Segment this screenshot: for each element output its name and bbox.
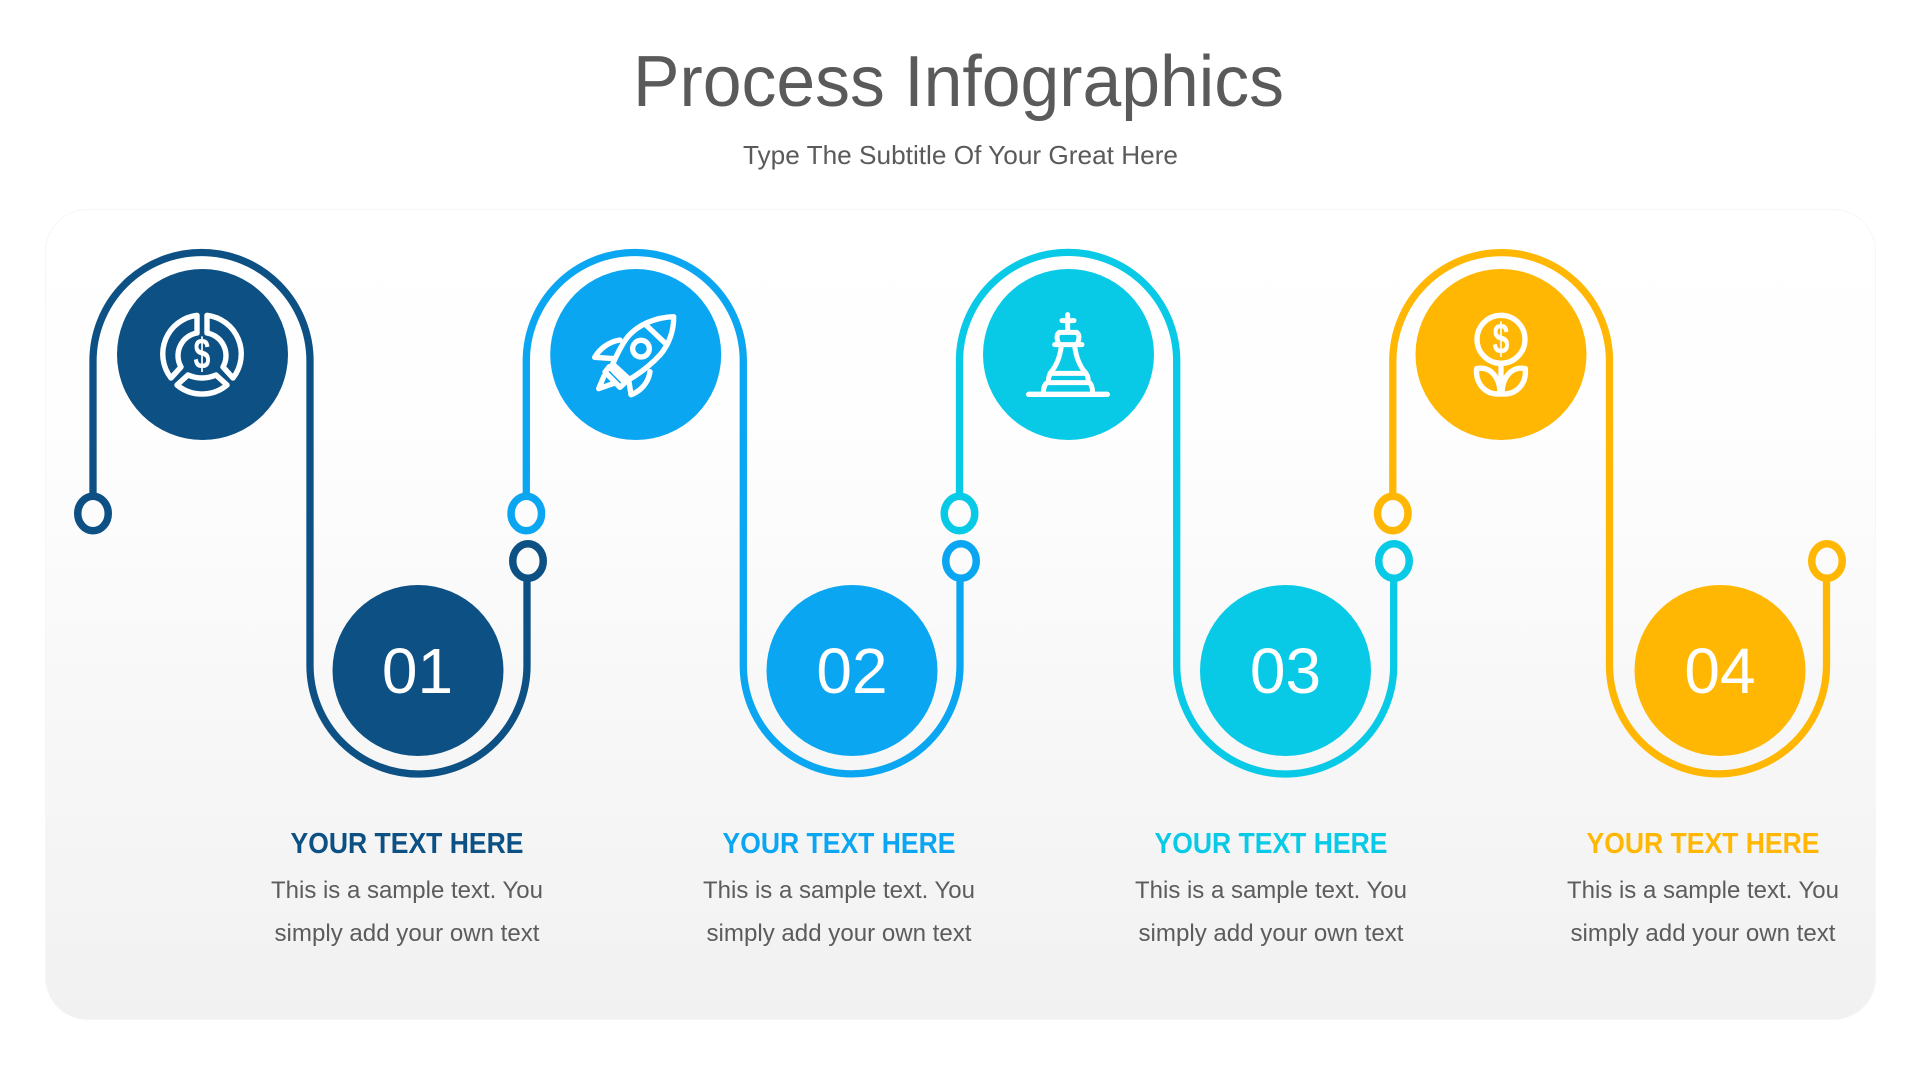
title: Process Infographics	[633, 42, 1284, 122]
body text 2	[703, 877, 975, 947]
start ring 4	[1378, 496, 1408, 531]
icon circle 2	[550, 269, 721, 440]
subtitle: Type The Subtitle Of Your Great Here	[743, 140, 1178, 170]
number circle 2	[766, 585, 938, 756]
number circle 1	[332, 585, 504, 756]
connector line 3	[960, 252, 1394, 774]
body text 4: simply add your own text	[1570, 920, 1836, 947]
body text 1: This is a sample text. You	[271, 877, 543, 904]
body text 3	[1135, 877, 1407, 947]
number 04: 04	[1684, 635, 1756, 707]
icon: dollar donut chart	[163, 315, 241, 394]
body text 1: simply add your own text	[274, 920, 540, 947]
icon circle 4	[1416, 269, 1586, 440]
step 2	[511, 252, 976, 947]
end ring 4	[1812, 544, 1842, 578]
start ring 3	[944, 496, 975, 531]
heading 4: YOUR TEXT HERE	[1586, 828, 1820, 860]
icon circle 1	[117, 269, 288, 440]
heading 2: YOUR TEXT HERE	[722, 828, 956, 860]
icon: money flower	[1477, 315, 1525, 394]
body text 2: This is a sample text. You	[703, 877, 975, 904]
end ring 3	[1379, 544, 1409, 578]
start ring 2	[511, 496, 542, 531]
connector line 1	[93, 252, 527, 774]
end ring 2	[946, 544, 976, 578]
number circle 3	[1200, 585, 1371, 756]
icon: rocket	[595, 317, 674, 395]
body text 3: simply add your own text	[1138, 920, 1404, 947]
icon circle 3	[983, 269, 1154, 440]
dollar sign: $	[194, 330, 211, 378]
heading 3: YOUR TEXT HERE	[1154, 828, 1388, 860]
number 01: 01	[382, 635, 453, 707]
body text 4	[1567, 877, 1839, 947]
panel: background card	[46, 210, 1876, 1020]
step 3	[944, 252, 1409, 947]
body text 3: This is a sample text. You	[1135, 877, 1407, 904]
number 02: 02	[816, 635, 888, 707]
step 4	[1378, 253, 1842, 947]
connector line 4	[1393, 253, 1826, 774]
body text 4: This is a sample text. You	[1567, 877, 1839, 904]
heading 1: YOUR TEXT HERE	[290, 828, 524, 860]
number circle 4	[1634, 585, 1806, 756]
start ring 1	[78, 496, 108, 531]
icon: chess king	[1029, 315, 1107, 394]
dollar sign: $	[1493, 315, 1510, 363]
end ring 1	[513, 544, 543, 578]
step 1	[78, 252, 543, 947]
body text 2: simply add your own text	[706, 920, 972, 947]
number 03: 03	[1250, 635, 1321, 707]
body text 1	[271, 877, 543, 947]
connector line 2	[526, 252, 960, 774]
